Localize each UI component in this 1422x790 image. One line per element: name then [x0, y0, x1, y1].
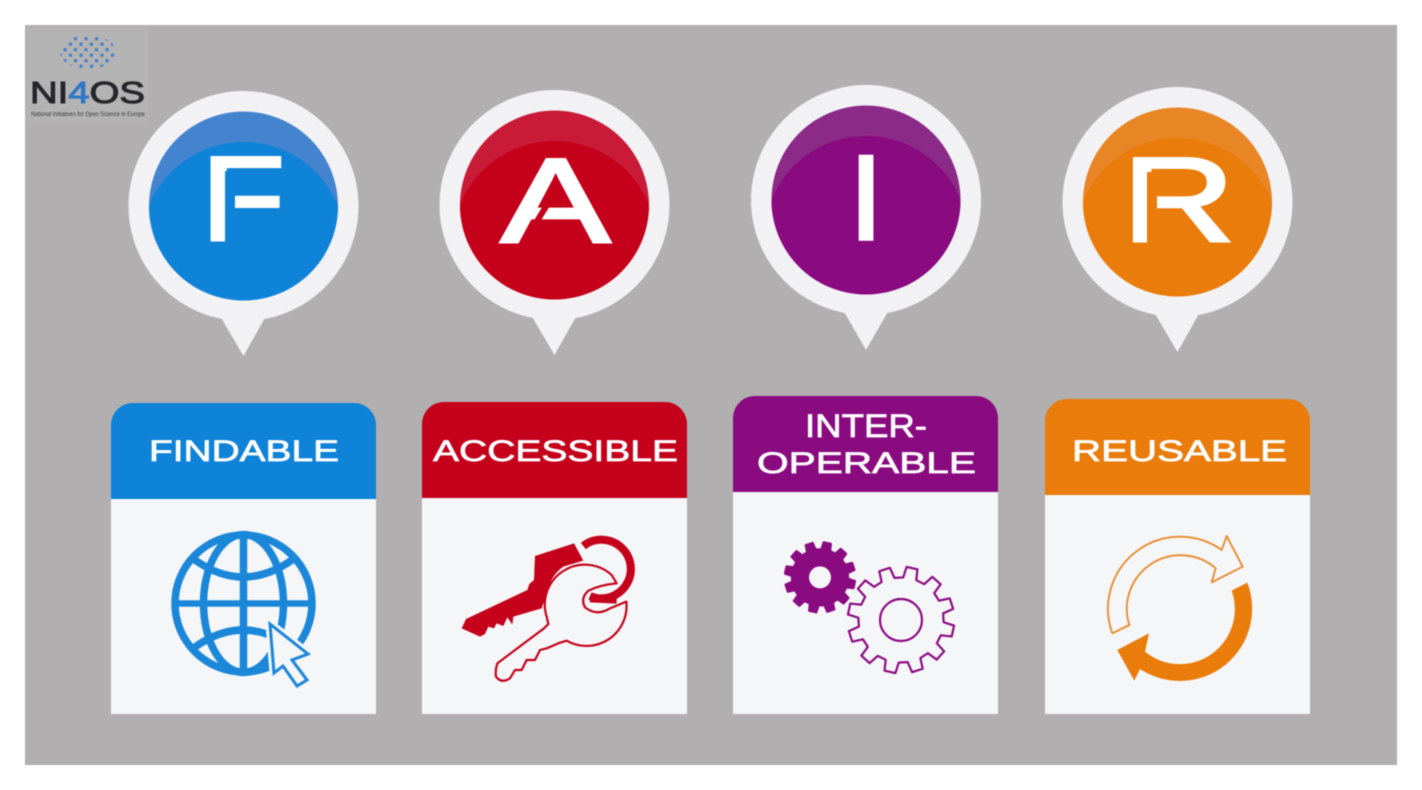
card: Interoperable — [733, 396, 998, 714]
icon: keys — [462, 540, 631, 681]
heading: Interoperable: INTER- — [805, 408, 927, 444]
logo tagline: National Initiatives for Open Science in Europe — [31, 112, 146, 118]
card: Interoperable: OPERABLE — [757, 447, 976, 480]
letter I: I — [849, 131, 883, 265]
heading: Findable: FINDABLE — [149, 435, 339, 468]
heading: Accessible: ACCESSIBLE — [433, 435, 678, 468]
card: Reusable — [1045, 399, 1310, 714]
card: Findable — [111, 403, 376, 714]
pin: A — [440, 90, 670, 355]
letter F: F — [201, 132, 285, 266]
icon: recycle arrows — [1108, 536, 1252, 681]
pin: F — [128, 91, 358, 356]
logo dot cloud — [60, 35, 116, 69]
card: Accessible — [422, 402, 687, 714]
icon: globe with cursor — [175, 534, 312, 686]
heading: Reusable: REUSABLE — [1072, 435, 1287, 468]
letter R: R — [1122, 133, 1235, 267]
logo: NI4OS — [27, 28, 148, 122]
logo wordmark: NI4OS — [30, 75, 145, 110]
icon: gears — [785, 542, 954, 673]
pin: I — [751, 85, 981, 350]
letter A: A — [501, 134, 610, 268]
pin: R — [1062, 87, 1292, 352]
